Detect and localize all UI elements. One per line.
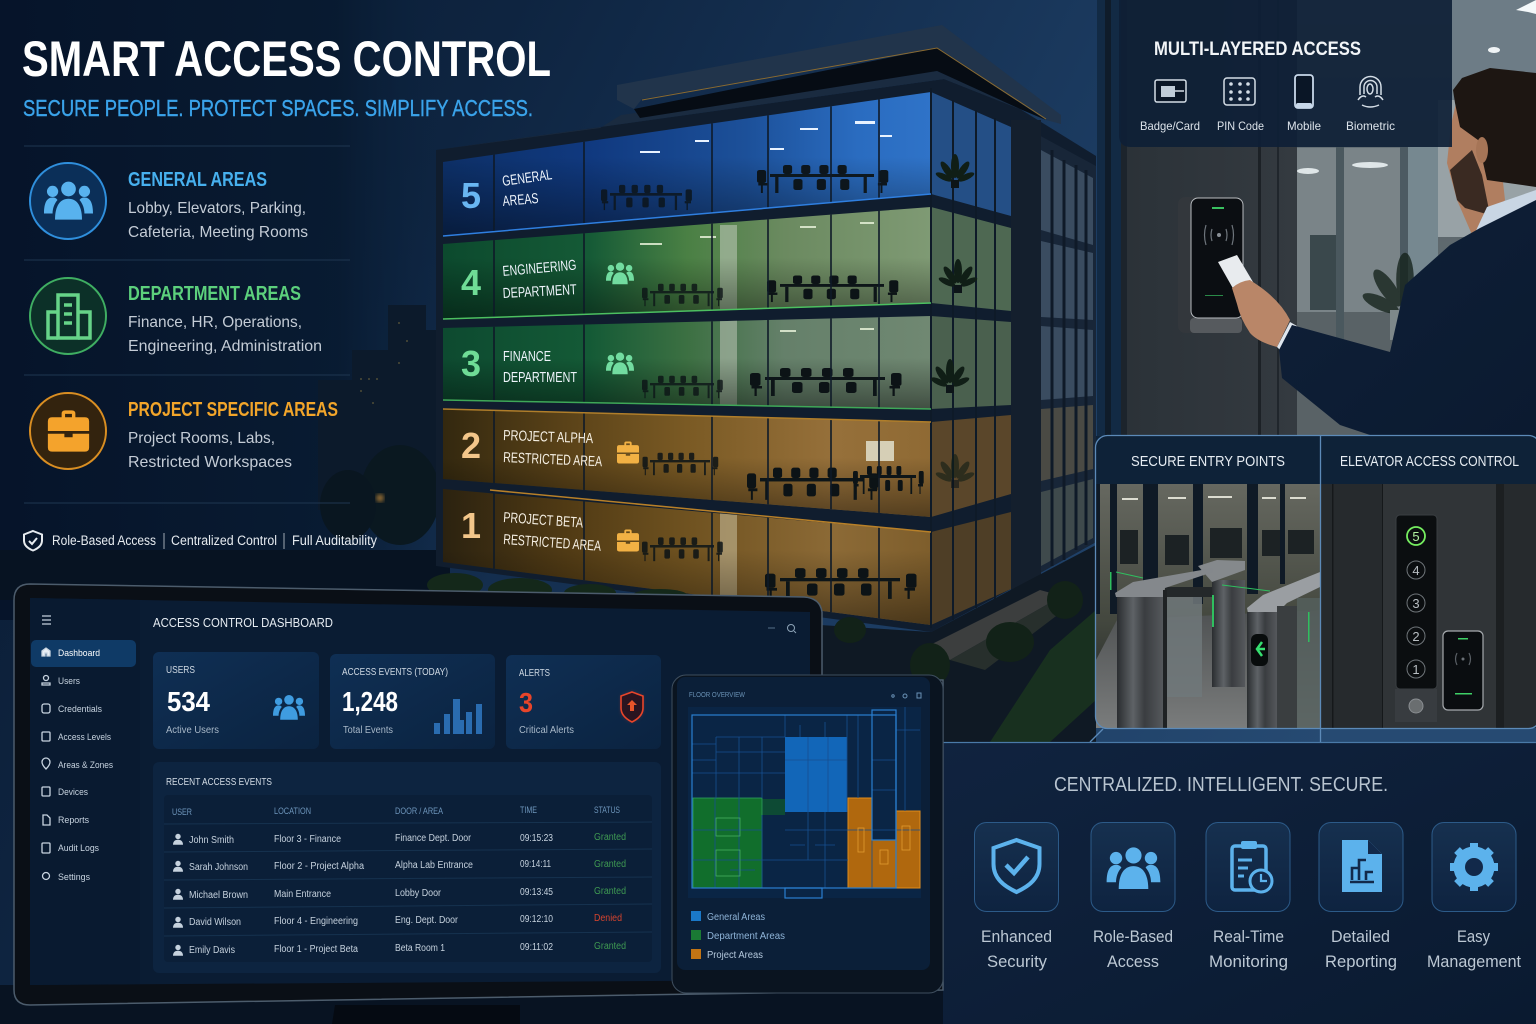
icon: general areas people bbox=[30, 163, 106, 239]
facade mullions bbox=[494, 90, 879, 630]
table: recent access events: Granted bbox=[594, 886, 626, 897]
floor 4 label: 4 bbox=[461, 262, 481, 303]
floor 4 label: ENGINEERING bbox=[502, 258, 577, 280]
table: recent access events: David Wilson bbox=[189, 917, 241, 928]
title: SMART ACCESS CONTROL bbox=[22, 31, 551, 87]
floor 1 label bbox=[461, 505, 639, 555]
legend: area types: General Areas bbox=[707, 912, 765, 923]
floor 4 label bbox=[461, 258, 634, 303]
benefit: real-time monitoring: Monitoring bbox=[1209, 952, 1288, 971]
dashboard sidebar: Devices bbox=[58, 787, 88, 798]
table: recent access events: Sarah Johnson bbox=[189, 862, 248, 873]
card reader bbox=[1190, 198, 1244, 333]
panel: multi-layered access: MULTI-LAYERED ACCESS bbox=[1154, 39, 1361, 60]
legend: area types: Department Areas bbox=[707, 931, 785, 942]
panel: multi-layered access: PIN Code bbox=[1217, 119, 1264, 133]
floor 5 label: 5 bbox=[461, 175, 481, 216]
benefit: real-time monitoring bbox=[1206, 822, 1290, 971]
building: roof slab bbox=[436, 25, 1061, 150]
table: recent access events: 09:15:23 bbox=[520, 833, 553, 844]
monitor stand bbox=[332, 1005, 520, 1024]
icon: mobile phone bbox=[1295, 75, 1313, 108]
floor 5 label: GENERAL bbox=[501, 167, 553, 190]
icon: alert shield bbox=[621, 692, 643, 722]
benefit: easy management bbox=[1427, 822, 1521, 971]
stat card: alerts: 3 bbox=[519, 687, 533, 718]
icon: department building bbox=[30, 278, 106, 354]
table: recent access events: Main Entrance bbox=[274, 889, 331, 900]
icon: badge card bbox=[1155, 80, 1186, 102]
floor 3 glass: green bbox=[443, 316, 1011, 409]
panel: secure entry points: SECURE ENTRY POINTS bbox=[1131, 454, 1285, 470]
floor plan map bbox=[688, 707, 921, 898]
panel: multi-layered access: Mobile bbox=[1287, 119, 1321, 133]
stat card: access events: 1,248 bbox=[342, 686, 398, 717]
table: recent access events bbox=[153, 762, 661, 973]
floor 5 glass: blue bbox=[443, 92, 1011, 236]
floor 2 label bbox=[461, 425, 639, 470]
floor 5 label: AREAS bbox=[502, 191, 539, 210]
stat card: access events: ACCESS EVENTS (TODAY) bbox=[342, 667, 448, 678]
dashboard sidebar: Settings bbox=[58, 872, 90, 883]
dashboard header bbox=[153, 615, 796, 633]
dashboard sidebar bbox=[30, 598, 140, 985]
panel: secure entry points bbox=[1096, 436, 1320, 728]
footer strip: access principles bbox=[24, 531, 377, 550]
benefit: role-based access bbox=[1091, 822, 1175, 971]
table: recent access events: STATUS bbox=[594, 805, 620, 815]
table: recent access events: Lobby Door bbox=[395, 888, 442, 899]
table: recent access events: Floor 3 - Finance bbox=[274, 834, 341, 845]
panel: access photo bbox=[1097, 0, 1536, 436]
floor buttons: 1 bbox=[1412, 662, 1420, 677]
table: recent access events: 09:12:10 bbox=[520, 914, 553, 925]
footer strip: access principles: Role-Based Access bbox=[52, 533, 156, 548]
stat card: alerts: Critical Alerts bbox=[519, 725, 574, 736]
footer strip: access principles: Centralized Control bbox=[171, 533, 277, 548]
zone: department areas: Engineering, Administration bbox=[128, 338, 322, 355]
benefit: role-based access: Access bbox=[1107, 952, 1159, 971]
heading: centralized intelligent secure: CENTRALIZED. INTELLIGENT. SECURE. bbox=[1054, 774, 1388, 796]
table: recent access events: Emily Davis bbox=[189, 945, 235, 956]
table: recent access events: Beta Room 1 bbox=[395, 943, 445, 954]
table: recent access events: TIME bbox=[520, 805, 537, 815]
stat card: access events: Total Events bbox=[343, 725, 393, 736]
zone: general areas: Cafeteria, Meeting Rooms bbox=[128, 224, 308, 241]
zone: project specific areas: Restricted Workspaces bbox=[128, 454, 292, 471]
table: recent access events: Floor 2 - Project Alpha bbox=[274, 861, 364, 872]
icon: project briefcase bbox=[30, 393, 106, 469]
icon: menu bbox=[42, 616, 51, 624]
dashboard header: ACCESS CONTROL DASHBOARD bbox=[153, 615, 333, 630]
dashboard sidebar: Users bbox=[58, 676, 80, 687]
floor 1 label: 1 bbox=[461, 505, 481, 546]
dashboard sidebar: Audit Logs bbox=[58, 843, 99, 854]
bar chart: events bbox=[434, 699, 482, 734]
floor 4 glass: green bbox=[443, 207, 1011, 319]
table: recent access events: LOCATION bbox=[274, 806, 311, 816]
building: side windows bbox=[1041, 150, 1093, 566]
dashboard sidebar: Areas & Zones bbox=[58, 760, 113, 771]
legend: area types: Project Areas bbox=[707, 950, 763, 961]
stat card: users: USERS bbox=[166, 665, 195, 676]
dashboard sidebar: Dashboard bbox=[58, 648, 100, 659]
table: recent access events: John Smith bbox=[189, 835, 234, 846]
benefit: detailed reporting bbox=[1319, 822, 1403, 971]
floor 4 label: DEPARTMENT bbox=[502, 282, 577, 302]
stat card: users: Active Users bbox=[166, 725, 219, 736]
benefit: detailed reporting: Reporting bbox=[1325, 952, 1397, 971]
table: recent access events: USER bbox=[172, 807, 192, 817]
floor 1 label: RESTRICTED AREA bbox=[503, 532, 602, 555]
floor 3 label: 3 bbox=[461, 343, 481, 384]
benefit: enhanced security bbox=[974, 822, 1058, 971]
table: recent access events: RECENT ACCESS EVENTS bbox=[166, 777, 272, 788]
benefit: enhanced security: Security bbox=[987, 952, 1047, 971]
ground: landscaping bbox=[427, 545, 1096, 742]
zone: general areas bbox=[30, 163, 308, 241]
table: recent access events: 09:11:02 bbox=[520, 942, 553, 953]
floor 1 label: PROJECT BETA bbox=[503, 510, 584, 532]
floor 3 label: FINANCE bbox=[503, 349, 551, 365]
benefit: real-time monitoring: Real-Time bbox=[1213, 927, 1284, 946]
zone: project specific areas bbox=[30, 393, 338, 471]
panel: floor overview tablet: FLOOR OVERVIEW bbox=[689, 692, 745, 699]
floor buttons: 5 bbox=[1412, 529, 1420, 544]
elevator card reader bbox=[1443, 631, 1483, 710]
panel: elevator access control bbox=[1320, 436, 1536, 728]
floor 2 label: PROJECT ALPHA bbox=[503, 428, 594, 447]
legend: area types bbox=[691, 911, 785, 961]
background: city skyline and trees bbox=[0, 0, 450, 620]
footer strip: access principles: Full Auditability bbox=[292, 533, 377, 548]
benefit: enhanced security: Enhanced bbox=[981, 927, 1052, 946]
dashboard sidebar: Reports bbox=[58, 815, 89, 826]
dashboard sidebar: Access Levels bbox=[58, 732, 111, 743]
floor 1 glass: amber bbox=[443, 489, 1011, 625]
zone: project specific areas: Project Rooms, Labs, bbox=[128, 430, 275, 447]
panel: left zones list bbox=[22, 31, 551, 550]
building: main body bbox=[436, 79, 1096, 632]
table: recent access events: 09:14:11 bbox=[520, 859, 551, 870]
floor strip under monitor bbox=[0, 985, 943, 1024]
table: recent access events: Granted bbox=[594, 941, 626, 952]
floor edge lighting bbox=[443, 194, 931, 532]
panel: multi-layered access bbox=[1119, 0, 1452, 147]
subtitle: SECURE PEOPLE. PROTECT SPACES. SIMPLIFY ACCESS. bbox=[23, 95, 533, 121]
man in suit presenting card bbox=[1218, 68, 1536, 436]
stat card: alerts: ALERTS bbox=[519, 668, 550, 679]
floor 5 label bbox=[461, 167, 553, 216]
floor buttons: 4 bbox=[1412, 563, 1420, 578]
floor labels bbox=[461, 167, 639, 555]
floor 2 label: RESTRICTED AREA bbox=[503, 450, 603, 470]
floor 3 label: DEPARTMENT bbox=[503, 370, 577, 386]
floor buttons: 3 bbox=[1412, 596, 1420, 611]
floor 2 glass: amber bbox=[443, 409, 1011, 517]
icon: biometric fingerprint bbox=[1358, 76, 1383, 107]
floor buttons bbox=[1395, 515, 1437, 722]
table: recent access events: Granted bbox=[594, 859, 626, 870]
zone: general areas: GENERAL AREAS bbox=[128, 169, 267, 191]
panel: access control dashboard monitor bbox=[14, 584, 943, 1005]
panel: floor overview tablet bbox=[672, 675, 943, 993]
icon: PIN keypad bbox=[1224, 78, 1255, 105]
table: recent access events: 09:13:45 bbox=[520, 887, 553, 898]
benefit: detailed reporting: Detailed bbox=[1331, 927, 1390, 946]
plants on right of floors bbox=[930, 154, 978, 488]
table: recent access events: DOOR / AREA bbox=[395, 806, 443, 816]
panel: multi-layered access: Badge/Card bbox=[1140, 119, 1200, 133]
building bbox=[436, 25, 1096, 632]
table: recent access events: Eng. Dept. Door bbox=[395, 915, 459, 926]
benefit: easy management: Easy bbox=[1457, 927, 1490, 946]
table: recent access events: Finance Dept. Door bbox=[395, 833, 472, 844]
table: recent access events: Granted bbox=[594, 832, 626, 843]
table: recent access events: Floor 4 - Engineering bbox=[274, 916, 358, 927]
zone: department areas bbox=[30, 278, 322, 355]
office interiors: furniture and lights bbox=[443, 92, 931, 625]
dashboard sidebar: Credentials bbox=[58, 704, 102, 715]
panel: multi-layered access: Biometric bbox=[1346, 119, 1395, 133]
zone: general areas: Lobby, Elevators, Parking, bbox=[128, 200, 306, 217]
panel: centralized benefits bbox=[943, 742, 1536, 1024]
benefit: easy management: Management bbox=[1427, 952, 1521, 971]
floor 2 label: 2 bbox=[461, 425, 481, 466]
zone: department areas: Finance, HR, Operations, bbox=[128, 314, 302, 331]
table: recent access events: Alpha Lab Entrance bbox=[395, 860, 473, 871]
frame around photo panels bbox=[1090, 436, 1536, 742]
turnstile gates bbox=[1110, 560, 1320, 728]
benefit: role-based access: Role-Based bbox=[1093, 927, 1173, 946]
stat card: users bbox=[153, 652, 319, 749]
icon: office plant bbox=[1362, 252, 1414, 314]
icon: shield check bbox=[24, 531, 42, 550]
floor 3 label bbox=[461, 343, 634, 386]
zone: project specific areas: PROJECT SPECIFIC AREAS bbox=[128, 399, 338, 421]
stat card: alerts bbox=[506, 655, 661, 749]
table: recent access events: Floor 1 - Project Beta bbox=[274, 944, 358, 955]
floor buttons: 2 bbox=[1412, 629, 1420, 644]
stat card: users: 534 bbox=[167, 686, 210, 717]
table: recent access events: Michael Brown bbox=[189, 890, 248, 901]
stat card: access events bbox=[330, 654, 495, 749]
table: recent access events: Denied bbox=[594, 913, 622, 924]
zone: department areas: DEPARTMENT AREAS bbox=[128, 283, 301, 305]
